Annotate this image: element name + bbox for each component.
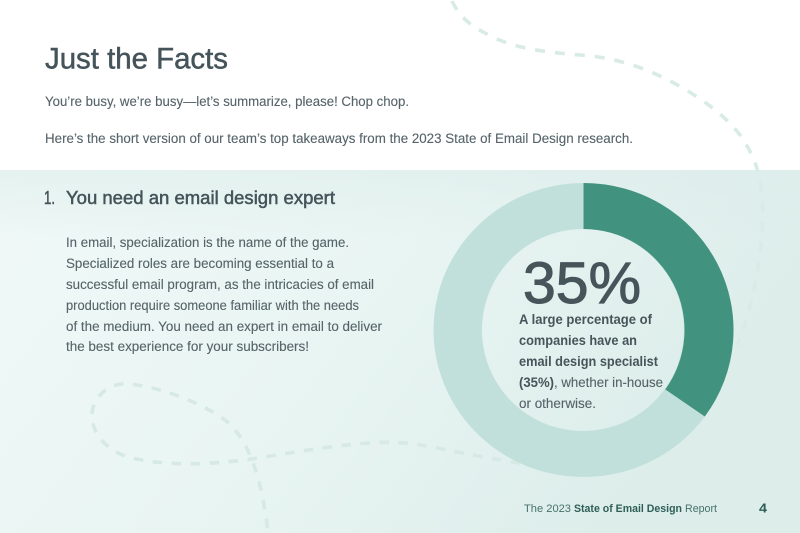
donut caption <box>519 312 663 411</box>
donut chart: 35% <box>434 183 734 477</box>
donut caption: (35%) <box>519 375 554 390</box>
body paragraph: In email, specialization is the name of the game. <box>66 235 349 250</box>
footer: 4 <box>759 500 768 516</box>
body paragraph <box>66 235 382 354</box>
intro text <box>45 94 633 146</box>
decorative dashed path: lower loop <box>92 384 520 533</box>
body paragraph: Specialized roles are becoming essential to a <box>66 256 334 271</box>
footer: Report <box>685 503 717 515</box>
body paragraph: the best experience for your subscribers! <box>66 339 309 354</box>
section heading: 1. <box>44 188 55 208</box>
footer <box>524 500 768 516</box>
donut caption: or otherwise. <box>519 396 596 411</box>
title: Just the Facts <box>45 42 228 76</box>
body paragraph: of the medium. You need an expert in email to deliver <box>66 319 382 334</box>
decorative dashed path: upper right <box>452 1 763 345</box>
donut caption: companies have an <box>519 333 637 348</box>
intro text: You’re busy, we’re busy—let’s summarize, please! Chop chop. <box>45 94 409 109</box>
donut caption: email design specialist <box>519 354 658 369</box>
panel: tinted lower section <box>0 170 800 533</box>
footer: State of Email Design <box>574 503 682 515</box>
body paragraph: production require someone familiar with the needs <box>66 298 359 313</box>
body paragraph: successful email program, as the intricacies of email <box>66 277 374 292</box>
donut caption: A large percentage of <box>519 312 652 327</box>
donut caption: , whether in-house <box>554 375 663 390</box>
intro text: Here’s the short version of our team’s top takeaways from the 2023 State of Email Design research. <box>45 131 633 146</box>
big number: 35% <box>523 251 641 316</box>
footer: The 2023 <box>524 503 571 515</box>
section heading: You need an email design expert <box>66 188 335 208</box>
